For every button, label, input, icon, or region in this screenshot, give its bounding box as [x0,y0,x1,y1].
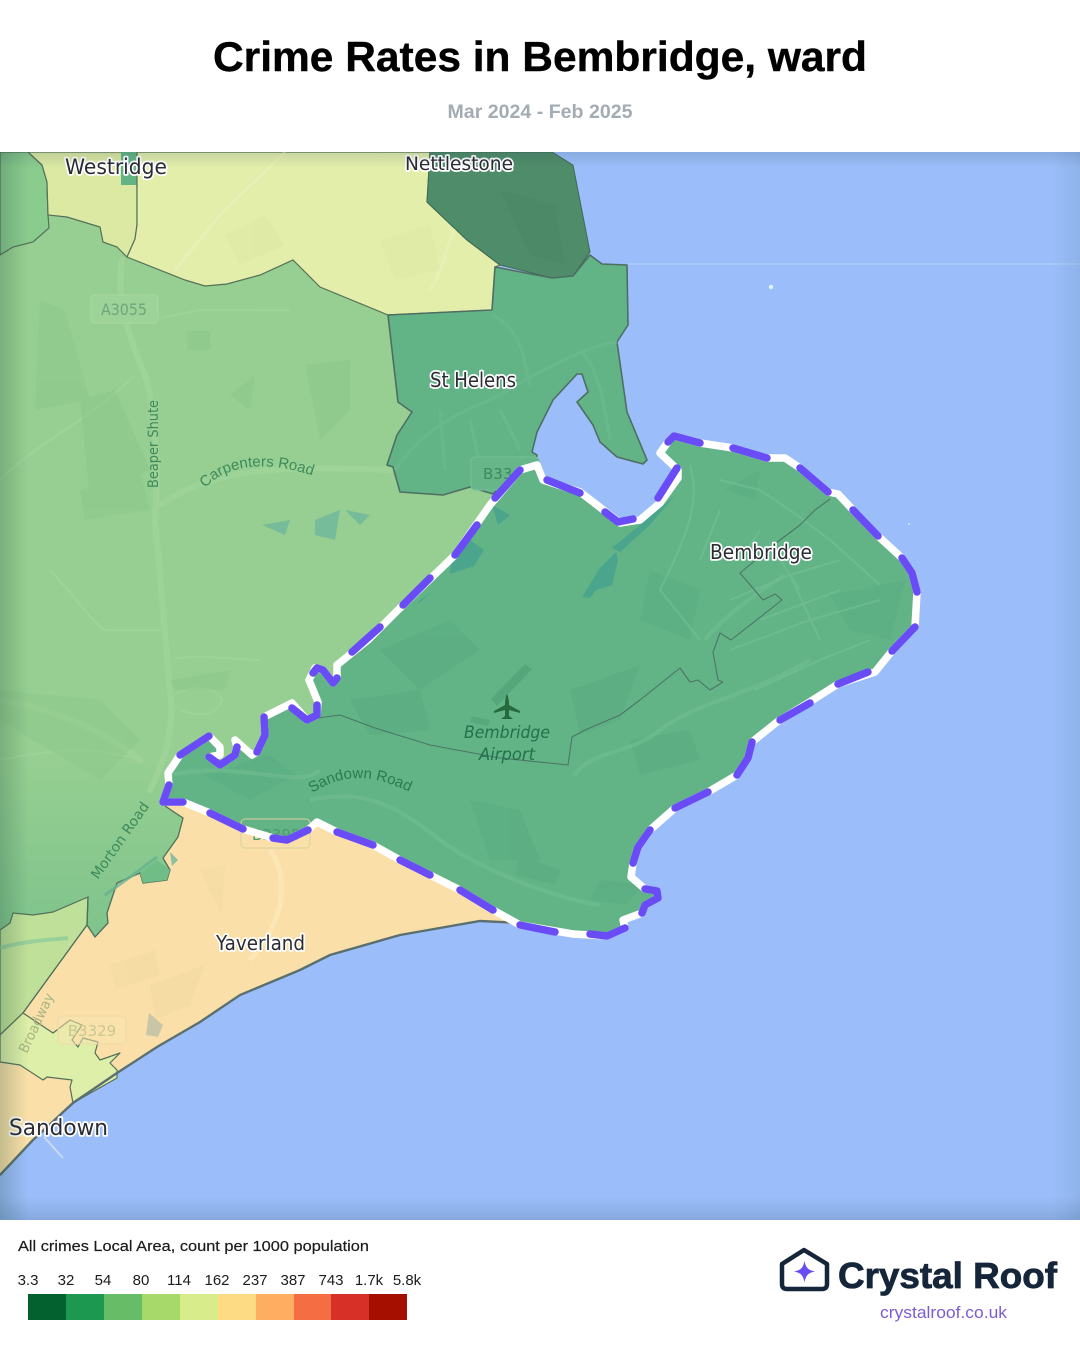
road shield: A3055: A3055 [101,300,147,319]
ward internal boundary [318,499,830,765]
map panel [0,152,1080,1220]
place label: St Helens: St Helens [430,368,516,392]
road shield: B3395 [241,819,310,848]
place label: Yaverland: Yaverland [215,931,305,955]
wordmark: Crystal Roof [838,1255,1058,1296]
legend scale values: 5.8k [393,1272,422,1289]
road label: B3330: B33 [483,465,512,483]
airport icon [470,664,532,726]
legend scale values: 114 [167,1272,191,1289]
road label: Morton Road: Morton Road [88,799,153,882]
region: Nettlestone [427,152,590,278]
place label: Westridge: Westridge [65,155,167,179]
roads on the western ward [118,257,393,793]
road label: B3330 [471,457,539,490]
woodland patches on the western ward [82,392,212,752]
title: Crime Rates in Bembridge, ward [213,33,867,80]
legend colour bar [28,1294,407,1320]
subtitle: date range: Mar 2024 - Feb 2025 [448,102,633,123]
region: Yaverland [0,795,530,1175]
ward boundary: white base line [163,436,917,936]
legend scale values: 237 [242,1272,268,1289]
legend scale values: 743 [318,1272,344,1289]
road shield: A3055 [91,295,158,323]
place label: Sandown: Sandown [9,1116,108,1141]
road label: Broadway: Broadway [16,991,58,1056]
airport label: Airport [478,745,536,765]
region: yellow rural ward [127,152,500,315]
legend scale values: 54 [95,1272,111,1289]
sea [0,152,1080,1220]
place label: Nettlestone: Nettlestone [405,153,513,175]
legend scale values: 80 [133,1272,149,1289]
road label: Carpenters Road: Carpenters Road [200,457,315,486]
region: western mainland ward [0,216,493,936]
ponds [170,510,370,866]
legend [18,1238,422,1320]
place label: Bembridge: Bembridge [710,540,812,564]
region: Bembridge ward fill [163,436,917,936]
ward boundary: purple dashes [163,436,917,936]
airport label: Bembridge [464,723,550,743]
region: St Helens [387,255,647,495]
region: top-left ward [0,152,49,255]
pier [44,1137,63,1158]
ward road network [659,465,880,690]
legend scale values: 3.3 [18,1272,38,1289]
region: Sandown-side pale ward [0,1013,120,1103]
legend scale values: 387 [280,1272,306,1289]
ward woodland and water [205,470,905,905]
road shield: B3395: B3395 [252,826,300,844]
coastline [0,921,520,1175]
icon: house with star [782,1250,827,1289]
airport label [464,723,550,765]
road shield: B3329: B3329 [68,1022,116,1040]
road shield: B3329 [58,1016,126,1044]
region: Westridge [28,152,137,257]
legend title: All crimes Local Area, count per 1000 population [18,1238,369,1255]
website url: crystalroof.co.uk [880,1304,1008,1322]
road label: Sandown Road: Sandown Road [308,769,413,792]
map edge vignette [0,152,1080,1220]
legend scale values: 32 [58,1272,74,1289]
legend scale values [18,1272,422,1289]
logo: Crystal Roof [782,1250,1058,1322]
legend scale values: 162 [204,1272,230,1289]
road label: Beaper Shute: Beaper Shute [146,400,162,488]
region: pale green ward south-west [0,897,88,1035]
legend scale values: 1.7k [355,1272,384,1289]
